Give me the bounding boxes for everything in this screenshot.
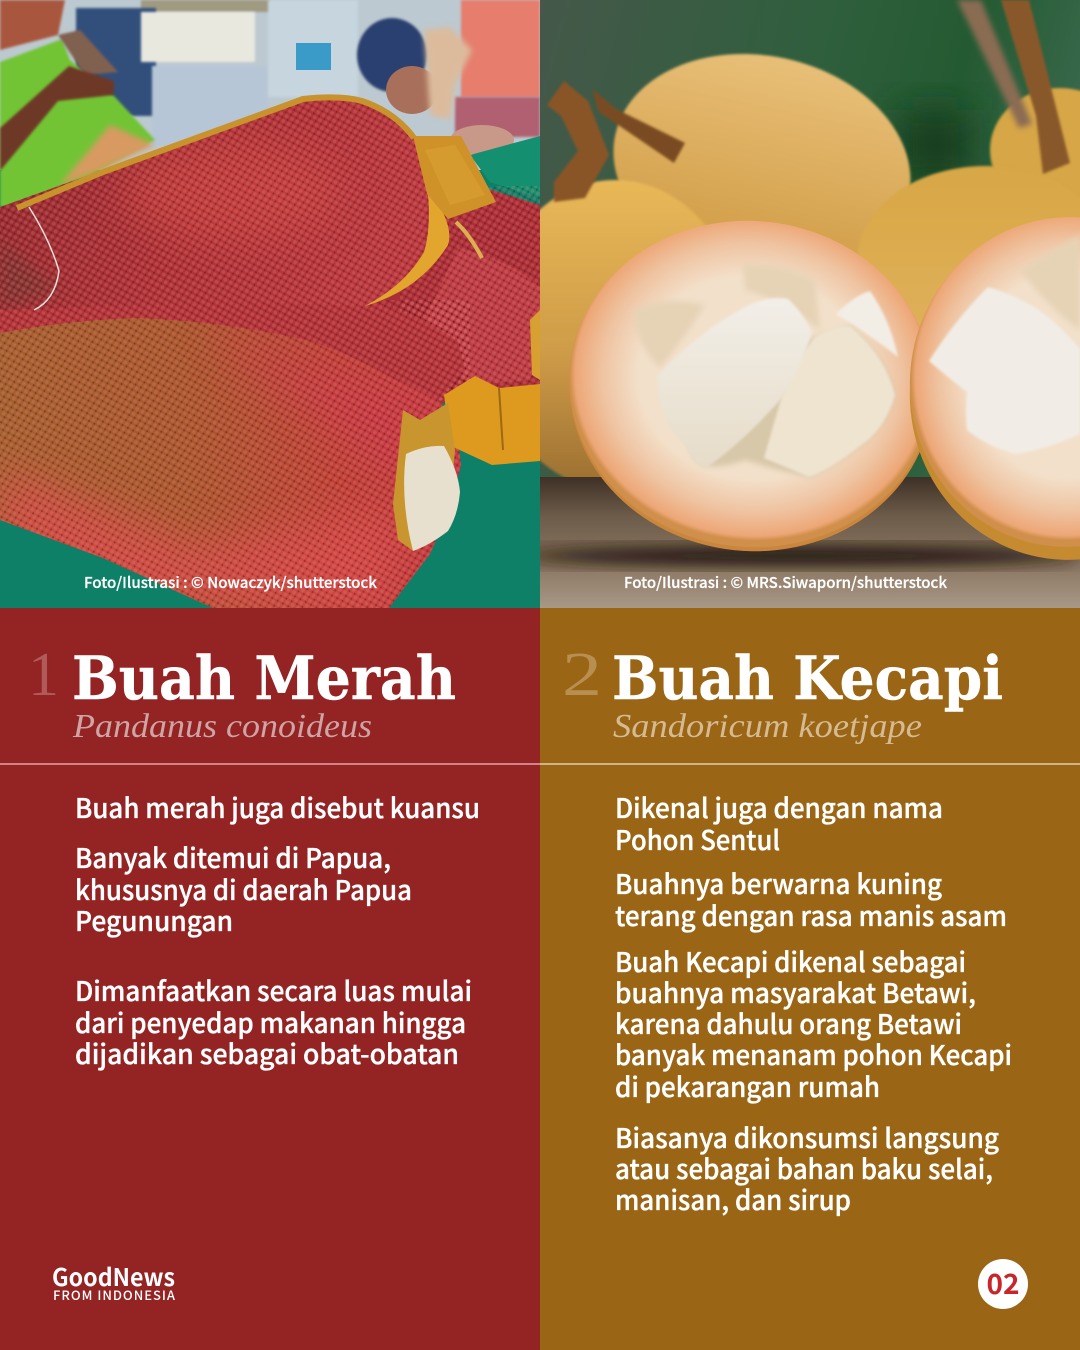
text block: buah merah facts: Pegunungan (75, 900, 233, 939)
text block: buah kecapi facts: buahnya masyarakat Betawi, (615, 972, 976, 1011)
subtitle: Sandoricum koetjape: Sandoricum koetjape (613, 708, 922, 745)
number 1: 1 (28, 641, 59, 709)
logo: GoodNews from Indonesia: GoodNews (52, 1258, 175, 1293)
title: Buah Merah: Buah Merah (72, 644, 456, 714)
text block: buah merah facts: Buah merah juga disebut kuansu (75, 787, 480, 826)
page number badge (978, 1259, 1028, 1309)
text block: buah kecapi facts: Biasanya dikonsumsi langsung (615, 1117, 999, 1156)
panel: left photo of buah merah (0, 0, 540, 610)
text block: buah kecapi facts: karena dahulu orang Betawi (615, 1003, 962, 1042)
text block: buah kecapi facts: manisan, dan sirup (615, 1179, 851, 1218)
panel: right photo of buah kecapi (487, 0, 1080, 608)
number 2: 2 (562, 641, 602, 709)
text block: buah kecapi facts: di pekarangan rumah (615, 1066, 880, 1105)
text block: buah merah facts (75, 787, 480, 1072)
subtitle: Pandanus conoideus: Pandanus conoideus (72, 708, 372, 745)
text block: buah merah facts: dari penyedap makanan hingga (75, 1002, 466, 1041)
logo: GoodNews from Indonesia: FROM INDONESIA (53, 1285, 176, 1304)
photo credit: left: Foto/Ilustrasi : © Nowaczyk/shutterstock (84, 572, 377, 593)
text block: buah kecapi facts: Buah Kecapi dikenal sebagai (615, 941, 966, 980)
text block: buah kecapi facts: banyak menanam pohon Kecapi (615, 1034, 1012, 1073)
text block: buah merah facts: Banyak ditemui di Papua, (75, 837, 391, 876)
page number badge: 02 (986, 1263, 1020, 1303)
text block: buah merah facts: Dimanfaatkan secara luas mulai (75, 970, 472, 1009)
text block: buah kecapi facts: terang dengan rasa manis asam (615, 895, 1007, 934)
text block: buah kecapi facts: atau sebagai bahan baku selai, (615, 1148, 993, 1187)
text block: buah kecapi facts (615, 787, 1012, 1218)
photo credit: right: Foto/Ilustrasi : © MRS.Siwaporn/shutterstock (624, 572, 947, 593)
panel: buah kecapi (540, 608, 1080, 1350)
title: Buah Kecapi: Buah Kecapi (612, 644, 1003, 714)
text block: buah kecapi facts: Pohon Sentul (615, 819, 780, 858)
text block: buah kecapi facts: Dikenal juga dengan nama (615, 787, 943, 826)
text block: buah merah facts: dijadikan sebagai obat-obatan (75, 1033, 459, 1072)
text block: buah merah facts: khususnya di daerah Papua (75, 869, 412, 908)
panel: buah merah (0, 608, 540, 1350)
text block: buah kecapi facts: Buahnya berwarna kuning (615, 863, 942, 902)
